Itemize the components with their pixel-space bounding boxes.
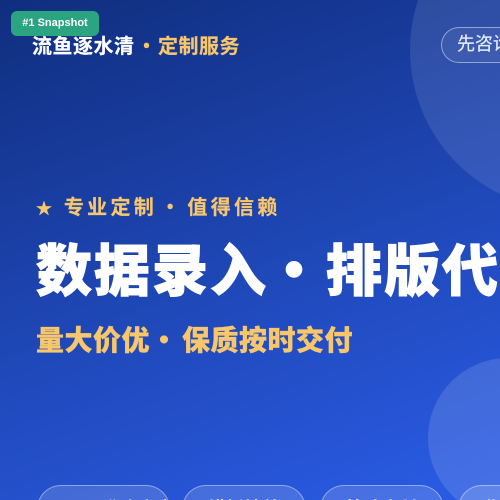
snapshot badge (11, 11, 99, 36)
subtitle: 量大价优·保质按时交付 (36, 319, 353, 359)
feature chip: 3 (320, 485, 444, 500)
feature chip: 4 (458, 485, 500, 500)
decorative circle: top right (410, 0, 500, 210)
feature chip: 1 (37, 485, 170, 500)
consult button (441, 27, 500, 63)
snapshot badge: #1 Snapshot (22, 17, 88, 29)
eyebrow tagline: ★ 专业定制·值得信赖 (36, 191, 281, 220)
decorative circle: bottom right (428, 358, 500, 500)
brand name: 流鱼逐水清·定制服务 (32, 30, 240, 59)
feature chip: 2 (182, 485, 306, 500)
